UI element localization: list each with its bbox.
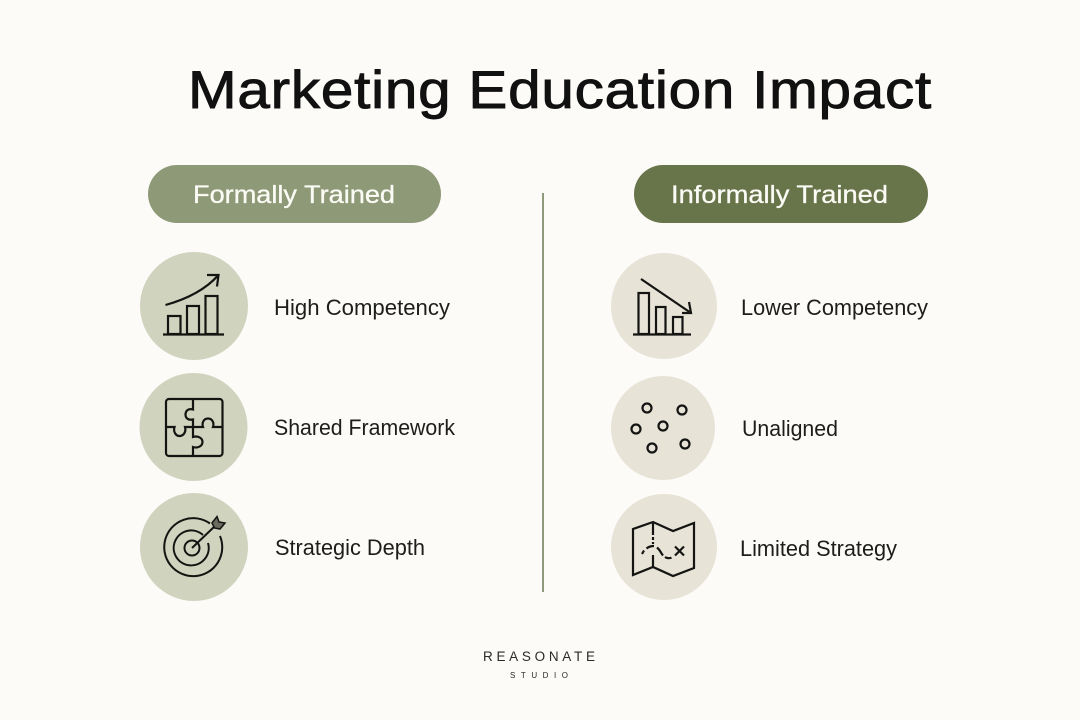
item: limited strategy bbox=[611, 494, 897, 600]
footer brand bbox=[483, 649, 595, 680]
item: lower competency bbox=[611, 253, 928, 359]
item: strategic depth bbox=[140, 493, 425, 601]
icon: folded map bbox=[611, 494, 717, 600]
icon: scattered dots bbox=[611, 376, 715, 480]
item: high competency bbox=[140, 252, 450, 360]
heading pill: informally trained: Informally Trained bbox=[671, 181, 888, 209]
label: Limited Strategy bbox=[740, 536, 897, 561]
footer brand: STUDIO bbox=[510, 671, 568, 680]
heading pill: formally trained: Formally Trained bbox=[193, 181, 395, 209]
divider bbox=[542, 193, 544, 592]
item: unaligned bbox=[611, 376, 838, 480]
icon: falling bar chart bbox=[611, 253, 717, 359]
heading pill: formally trained bbox=[148, 165, 441, 223]
icon: rising bar chart bbox=[140, 252, 248, 360]
label: Strategic Depth bbox=[275, 535, 425, 560]
item: shared framework bbox=[140, 373, 456, 481]
panel: informally trained bbox=[611, 165, 928, 600]
label: Unaligned bbox=[742, 416, 838, 441]
icon: puzzle bbox=[140, 373, 248, 481]
icon: target with arrow bbox=[140, 493, 248, 601]
heading pill: informally trained bbox=[634, 165, 928, 223]
label: Shared Framework bbox=[274, 415, 456, 440]
panel: formally trained bbox=[140, 165, 456, 601]
footer brand: REASONATE bbox=[483, 649, 595, 664]
label: High Competency bbox=[274, 295, 450, 320]
label: Lower Competency bbox=[741, 295, 928, 320]
title: Marketing Education Impact bbox=[188, 61, 932, 120]
